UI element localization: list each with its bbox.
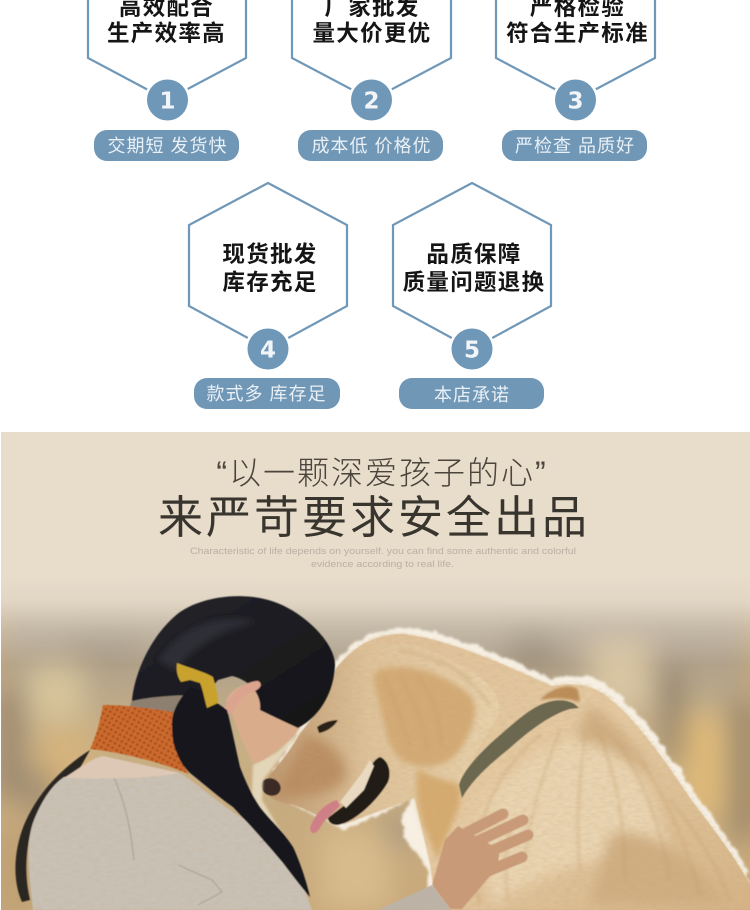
number badge 4: 4 [260,338,276,364]
nape [130,694,183,713]
dog body [336,634,750,910]
ear [374,667,475,766]
heading: hexagon 3 text [506,0,649,46]
sweater creases [114,778,264,906]
top fade [1,575,750,665]
number badge 3: 3 [567,88,584,114]
pill label 5: 本店承诺 [434,385,510,405]
panel: hexagon 3 [496,0,655,161]
pill label 1 [94,130,239,161]
face [226,685,300,763]
heading: hexagon 2 text [312,0,432,46]
blurred autumn background [1,610,750,910]
teeth [340,760,374,808]
fur strands [400,649,702,904]
head and muzzle [268,660,499,824]
ear [224,681,261,714]
white rim light [262,628,750,910]
muzzle tan shading [275,735,346,797]
sweater [29,773,312,910]
pill label 4: 款式多 库存足 [206,384,327,404]
collar [459,700,579,798]
heading: hexagon 5 text [403,242,545,295]
hair shine [158,619,255,670]
eye [317,720,338,733]
pill label 2: 成本低 价格优 [311,136,432,156]
english caption: evidence according to real life. [311,559,454,570]
pill label 4 [194,378,340,409]
panel: photo banner [0,432,750,910]
shoulder tuft [540,686,580,702]
heading: hexagon 4 text: 库存充足 [222,270,318,295]
ponytail [172,687,310,897]
pill label 2 [298,130,443,161]
pill label 3 [502,130,647,161]
heading: hexagon 4 text [222,242,318,295]
hand [432,814,528,909]
long hair left strand [15,750,90,902]
main title: 来严苛要求安全出品 [158,492,590,543]
number badge 2: 2 [363,88,380,114]
number badge 4 [248,328,288,370]
panel: hexagon 4 [189,183,347,409]
scarf [90,705,189,774]
pill label 3: 严检查 品质好 [515,136,635,156]
heading: hexagon 5 text: 质量问题退换 [403,270,545,295]
number badge 3 [555,80,596,120]
hair tie [177,663,218,708]
heading: hexagon 3 text: 符合生产标准 [506,21,649,46]
quote line: “以一颗深爱孩子的心” [216,455,548,491]
beige header area [1,432,750,575]
pill label 1: 交期短 发货快 [107,136,228,156]
number badge 5 [452,328,492,370]
number badge 1 [147,80,188,120]
heading: hexagon 1 text [107,0,226,46]
heading: hexagon 1 text: 生产效率高 [107,21,226,46]
pill label 5 [399,378,544,409]
illustration: dog [258,628,750,910]
english caption [190,546,576,570]
neck ruff [416,768,460,860]
sleeve [378,885,451,910]
hair [132,596,335,728]
heading: hexagon 2 text: 量大价更优 [312,21,432,46]
neck skin [64,756,180,778]
english caption: Characteristic of life depends on yourself. you can find some authentic and colorful [190,546,576,557]
tongue [310,800,340,833]
illustration: girl [15,596,451,910]
number badge 1: 1 [159,88,176,114]
number badge 2 [351,80,392,120]
light chest fur [481,733,670,905]
panel: hexagon 2 [292,0,451,161]
mouth [328,757,390,825]
fingers [466,814,528,871]
heading: hexagon 4 text: 现货批发 [222,242,318,267]
fur grain [300,630,750,910]
heading: hexagon 5 text: 品质保障 [426,242,522,267]
background gap between face and muzzle [249,732,299,848]
panel: hexagon 5 [393,183,551,409]
panel: hexagon 1 [88,0,246,161]
nose [262,778,282,796]
number badge 5: 5 [464,338,480,364]
